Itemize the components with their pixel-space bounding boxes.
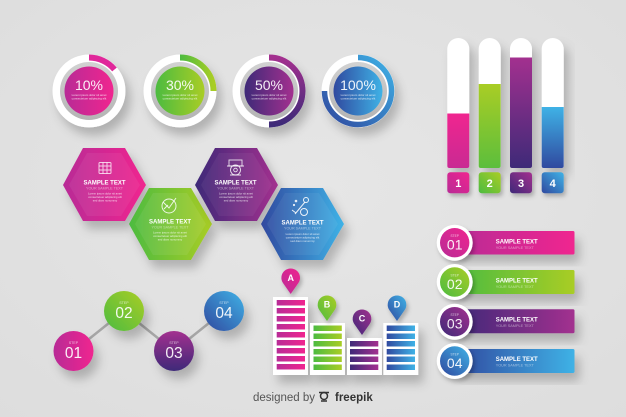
pin C: C: [359, 314, 366, 324]
panel: progress circles: [52, 54, 394, 128]
progress circle 10%: [52, 54, 126, 128]
hexagon pink: YOUR SAMPLE TEXT: [86, 186, 124, 190]
hexagon green: YOUR SAMPLE TEXT: [151, 226, 189, 230]
progress circle 50%: consectetuer adipiscing elit: [252, 96, 287, 100]
row 03: 03: [447, 316, 463, 332]
row 03: SAMPLE TEXT: [496, 318, 538, 324]
row 02: STEP: [451, 274, 459, 278]
step 04: STEP: [219, 301, 229, 305]
row 01: STEP: [451, 234, 459, 238]
bar 1: 1: [455, 178, 461, 190]
progress circle 50%: [232, 54, 306, 128]
progress circle 10%: consectetuer adipiscing elit: [72, 96, 107, 100]
row 01: 01: [447, 236, 463, 252]
step 03: [154, 331, 194, 371]
hexagon purple: Lorem ipsum dolor sit amet: [219, 192, 253, 196]
step 03: STEP: [169, 341, 179, 345]
hexagon blue: [261, 188, 344, 260]
pin C: [353, 309, 371, 335]
bar 4: [542, 38, 564, 193]
hexagon blue: YOUR SAMPLE TEXT: [284, 226, 322, 230]
row 04: STEP: [451, 352, 459, 356]
hexagon green: [129, 188, 212, 260]
progress circle 100%: 100%: [340, 77, 376, 93]
hexagon green: Lorem ipsum dolor sit amet: [153, 230, 187, 234]
hexagon purple: sed diam nonummy: [224, 198, 249, 202]
column B: [310, 323, 345, 375]
connector lines: [74, 311, 224, 351]
icon: check broom: [162, 198, 176, 213]
panel: connected steps: [54, 291, 244, 371]
progress circle 100%: consectetuer adipiscing elit: [341, 96, 376, 100]
bar 4: 4: [550, 178, 557, 190]
row 02: 02: [447, 276, 463, 292]
row 03: [437, 304, 574, 340]
step 02: [104, 291, 144, 331]
progress circle 30%: Lorem ipsum dolor sit amet: [163, 93, 198, 97]
progress circle 50%: Lorem ipsum dolor sit amet: [252, 93, 287, 97]
footer credit: [253, 392, 373, 404]
step 04: 04: [215, 305, 233, 322]
hexagon pink: sed diam nonummy: [93, 198, 118, 202]
hexagon blue: Lorem ipsum dolor sit amet: [286, 232, 320, 236]
hexagon purple: YOUR SAMPLE TEXT: [217, 186, 255, 190]
footer credit: designed by: [253, 392, 315, 404]
pin B: [318, 295, 336, 321]
step 02: 02: [115, 305, 133, 322]
step 04: [204, 291, 244, 331]
row 02: [437, 264, 574, 300]
hexagon blue: consectetuer adipiscing elit: [286, 236, 320, 240]
row 04: 04: [447, 355, 463, 371]
panel: vertical bars: [447, 38, 564, 193]
row 01: YOUR SAMPLE TEXT: [496, 246, 534, 250]
row 04: [437, 343, 574, 379]
row 03: YOUR SAMPLE TEXT: [496, 324, 534, 328]
hexagon pink: [63, 148, 146, 221]
pin A: [281, 268, 300, 294]
row 02: SAMPLE TEXT: [496, 278, 538, 284]
panel: hexagons: [63, 148, 344, 260]
pin D: D: [394, 300, 401, 310]
row 02: YOUR SAMPLE TEXT: [496, 285, 534, 289]
row 04: YOUR SAMPLE TEXT: [496, 364, 534, 368]
progress circle 30%: [144, 54, 216, 128]
hexagon blue: sed diam nonummy: [290, 239, 315, 243]
icon: keypad: [99, 162, 111, 174]
footer credit: freepik: [335, 392, 373, 404]
pin D: [388, 295, 406, 321]
row 01: SAMPLE TEXT: [496, 240, 538, 246]
hexagon purple: SAMPLE TEXT: [214, 180, 257, 186]
progress circle 30%: 30%: [166, 77, 194, 93]
panel: stacked bar chart: [273, 268, 418, 375]
step 03: 03: [165, 345, 183, 362]
hexagon green: SAMPLE TEXT: [149, 220, 191, 226]
hexagon blue: SAMPLE TEXT: [281, 220, 324, 226]
pin B: B: [324, 300, 331, 310]
hexagon pink: consectetuer adipiscing elit: [88, 195, 122, 199]
progress circle 30%: consectetuer adipiscing elit: [163, 96, 198, 100]
panel: step labels: [437, 225, 574, 379]
progress circle 100%: Lorem ipsum dolor sit amet: [341, 93, 376, 97]
step 01: 01: [65, 345, 82, 362]
icon: freepik logo: [319, 392, 329, 401]
row 01: [437, 225, 574, 261]
pin A: A: [287, 273, 294, 283]
icon: wrench and gear: [292, 198, 308, 216]
hexagon pink: Lorem ipsum dolor sit amet: [88, 192, 122, 196]
row 04: SAMPLE TEXT: [496, 357, 538, 363]
hexagon pink: SAMPLE TEXT: [83, 180, 126, 186]
progress circle 10%: Lorem ipsum dolor sit amet: [72, 93, 107, 97]
column A: [273, 297, 308, 375]
bar 3: [510, 38, 532, 193]
bar 2: [479, 38, 501, 193]
hexagon purple: consectetuer adipiscing elit: [219, 195, 253, 199]
hexagon green: sed diam nonummy: [158, 238, 183, 242]
progress circle 100%: [322, 54, 394, 128]
row 03: STEP: [451, 313, 459, 317]
bar 3: 3: [518, 178, 524, 190]
step 01: [54, 331, 94, 371]
column D: [383, 323, 418, 375]
progress circle 10%: 10%: [75, 77, 103, 93]
hexagon green: consectetuer adipiscing elit: [153, 234, 187, 238]
progress circle 50%: 50%: [255, 77, 283, 93]
step 02: STEP: [119, 301, 129, 305]
icon: robot gear: [227, 160, 244, 175]
hexagon purple: [195, 148, 278, 221]
column C: [347, 338, 382, 375]
bar 1: [447, 38, 469, 193]
step 01: STEP: [69, 341, 79, 345]
bar 2: 2: [487, 178, 493, 190]
